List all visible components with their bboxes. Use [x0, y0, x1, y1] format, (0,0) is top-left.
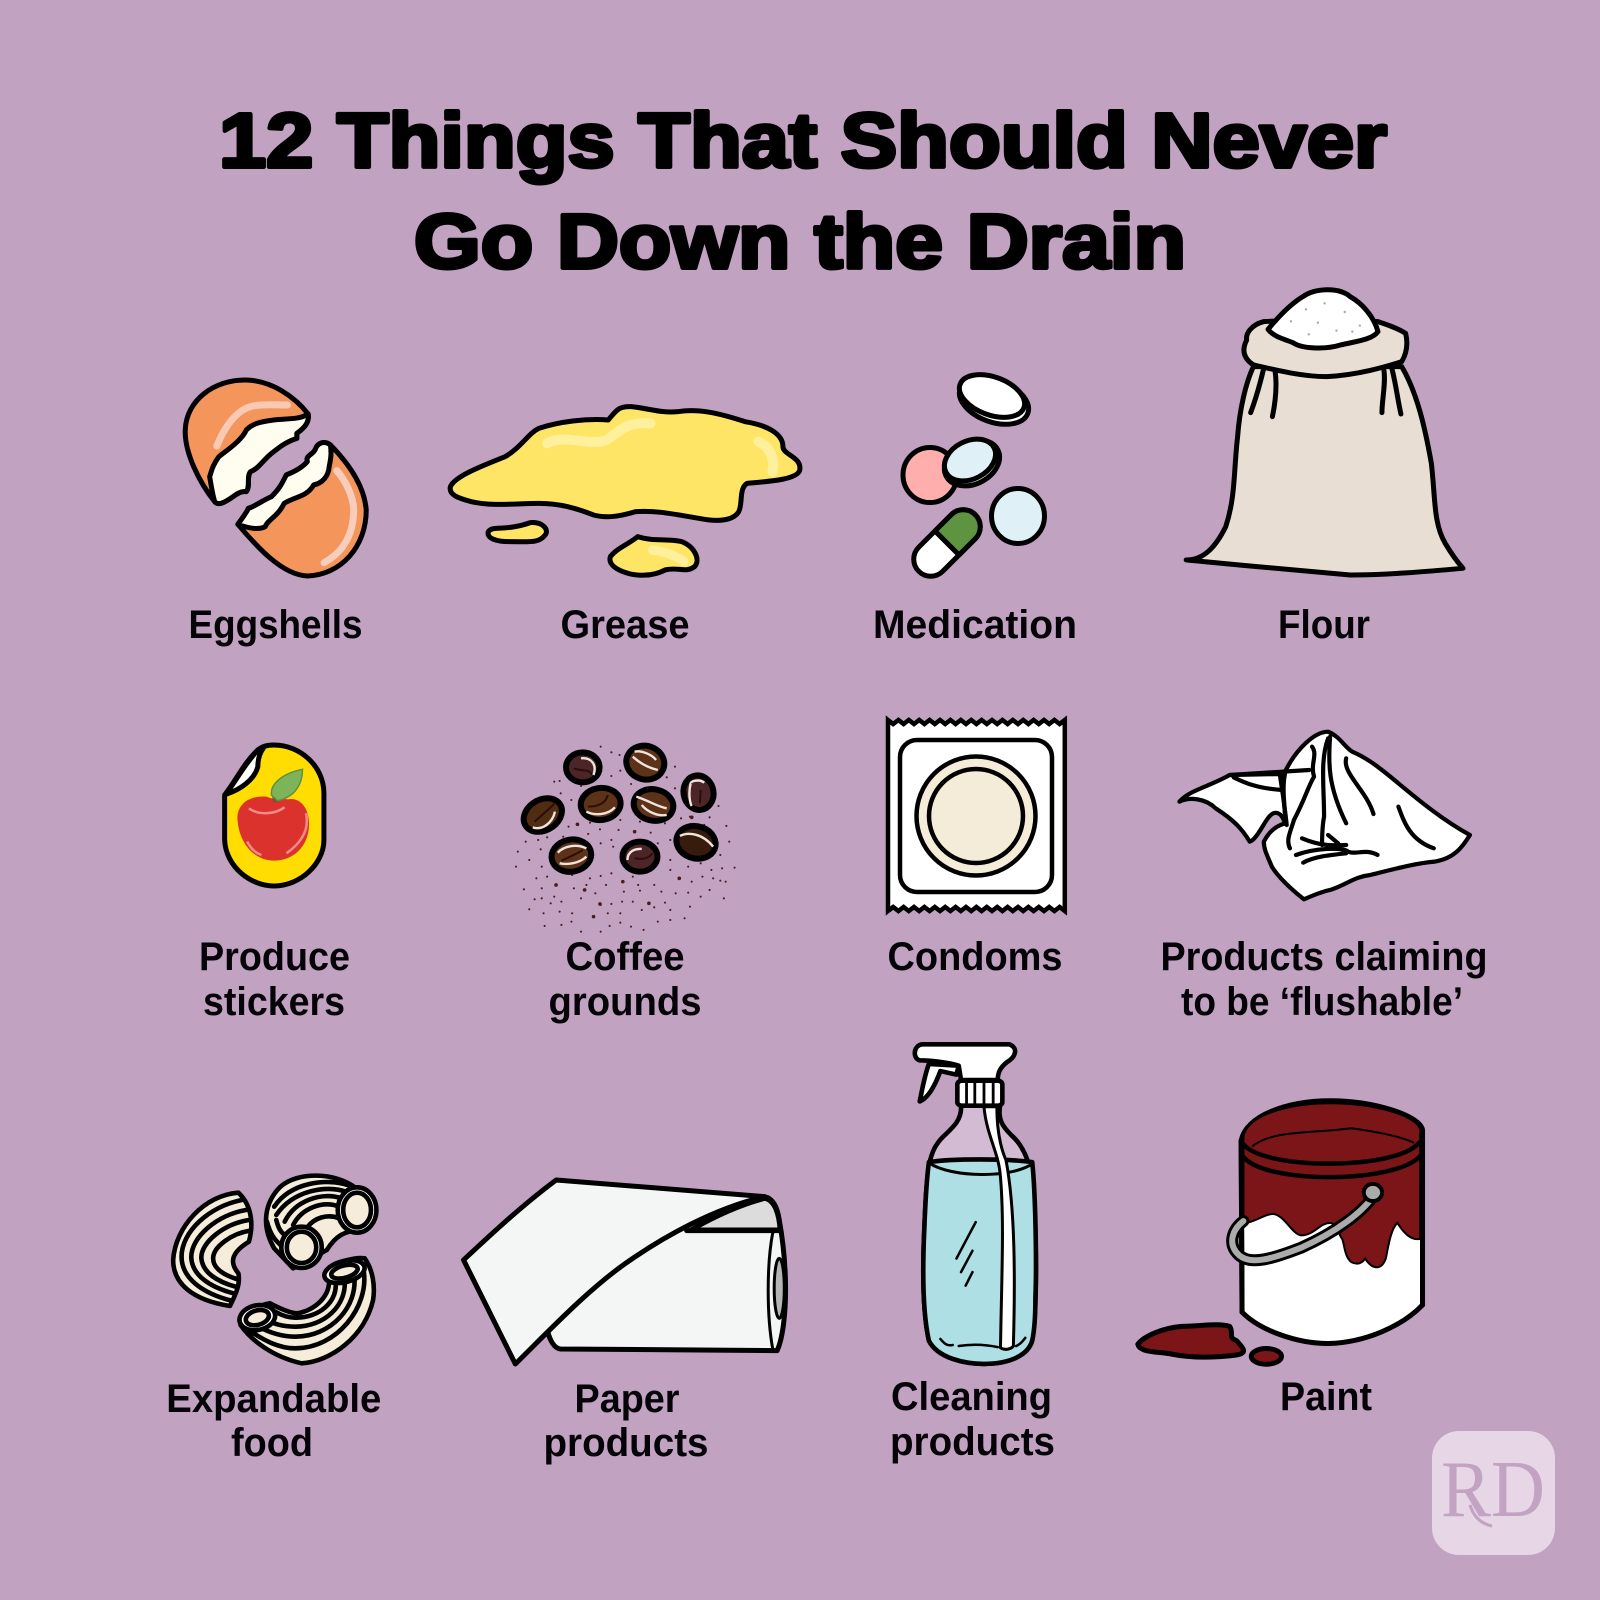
label: Expandable food: Expandable [166, 1377, 381, 1421]
icon: crumpled wipe [1179, 732, 1470, 899]
icon: apple sticker [225, 745, 324, 886]
label: Cleaning products [890, 1375, 1055, 1464]
panel: condoms [888, 720, 1065, 979]
title: Go Down the Drain [414, 199, 1186, 285]
label: Flour: Flour [1278, 603, 1370, 647]
label: Medication: Medication [873, 603, 1077, 647]
panel: produce stickers [199, 745, 350, 1024]
panel: medication [873, 367, 1077, 647]
panel: paper products [464, 1180, 786, 1465]
panel: flour [1186, 290, 1463, 647]
label: Paper products: products [544, 1421, 708, 1465]
label: Coffee grounds: grounds [548, 980, 702, 1024]
icon: cracked eggshell [185, 380, 366, 576]
label: Coffee grounds: Coffee [566, 935, 684, 979]
label: Grease: Grease [560, 603, 690, 647]
label: Eggshells: Eggshells [188, 603, 362, 647]
label: Produce stickers: stickers [203, 980, 345, 1024]
label: Coffee grounds [548, 935, 702, 1024]
icon: pills and capsule [903, 367, 1044, 583]
panel: coffee grounds [516, 739, 735, 1024]
label: Products claiming to be flushable: to be ‘flushable’ [1181, 980, 1463, 1024]
panel: grease [450, 407, 800, 647]
icon: paint can and spill [1138, 1101, 1423, 1364]
label: Products claiming to be flushable: Products claiming [1160, 935, 1488, 979]
panel: cleaning products [890, 1044, 1055, 1464]
label: Expandable food [166, 1377, 381, 1465]
title: 12 Things That Should Never [219, 98, 1387, 184]
label: Expandable food: food [231, 1421, 313, 1465]
icon: macaroni [173, 1176, 376, 1363]
label: Paper products [544, 1377, 708, 1465]
label: Cleaning products: products [890, 1420, 1055, 1464]
icon: grease puddles [450, 407, 800, 575]
label: Produce stickers: Produce [199, 935, 350, 979]
panel: flushable products [1160, 732, 1488, 1024]
icon: paper towel roll [464, 1180, 786, 1364]
icon: condom wrapper [888, 720, 1065, 911]
title [219, 98, 1387, 285]
panel: paint [1138, 1101, 1423, 1419]
label: Paint: Paint [1280, 1375, 1372, 1419]
icon: spray bottle [915, 1044, 1036, 1364]
icon: coffee beans and grounds [516, 739, 735, 932]
label: Condoms: Condoms [888, 935, 1062, 979]
label: Cleaning products: Cleaning [891, 1375, 1052, 1419]
logo: RD badge [1432, 1431, 1555, 1555]
panel: eggshells [185, 380, 366, 647]
panel: expandable food [166, 1176, 381, 1465]
icon: flour sack [1186, 290, 1463, 575]
label: Products claiming to be flushable [1160, 935, 1488, 1024]
label: Produce stickers [199, 935, 350, 1024]
label: Paper products: Paper [574, 1377, 680, 1421]
logo: RD badge: RD [1441, 1446, 1545, 1534]
